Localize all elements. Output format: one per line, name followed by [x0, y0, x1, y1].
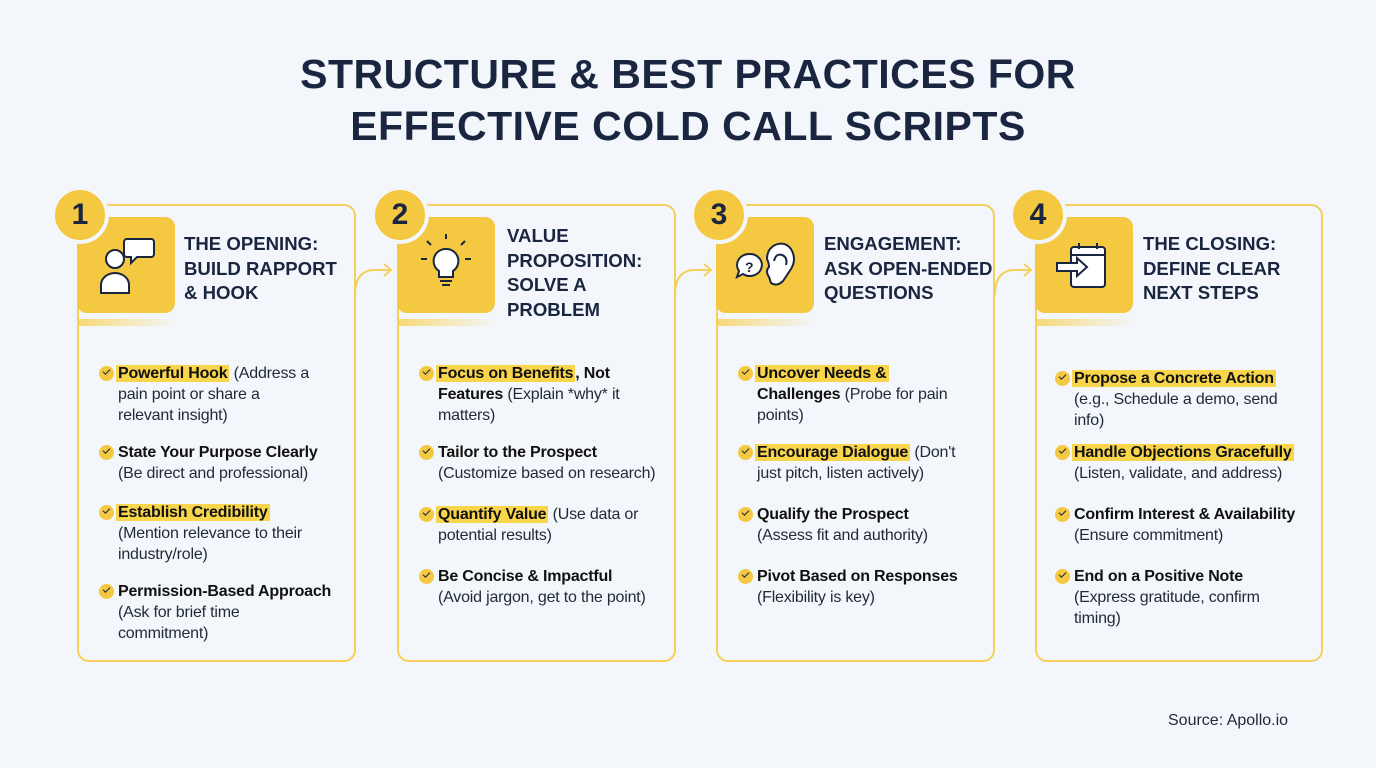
items [99, 365, 310, 424]
panel: engagement: (Flexibility is key) [757, 589, 875, 606]
items: (e.g., Schedule a demo, send [1074, 391, 1277, 408]
items: Propose a Concrete Action [1074, 370, 1274, 387]
panel: closing: End on a Positive Note [1074, 568, 1243, 585]
items: matters) [438, 407, 495, 424]
icon: person speech [77, 217, 175, 313]
title: STRUCTURE & BEST PRACTICES FOR [300, 51, 1076, 97]
panel: value proposition: potential results) [438, 527, 552, 544]
items [419, 365, 620, 424]
panel: opening: State Your Purpose Clearly [118, 444, 318, 461]
panel: value proposition: Quantify Value (Use data or [438, 506, 638, 523]
panel: engagement: (Assess fit and authority) [757, 527, 928, 544]
title [300, 51, 1076, 149]
number 4 [1009, 186, 1067, 244]
heading: ENGAGEMENT: [824, 233, 961, 254]
heading: SOLVE A [507, 274, 587, 295]
items: Challenges (Probe for pain [757, 386, 947, 403]
number 2 [371, 186, 429, 244]
heading: THE CLOSING: [1143, 233, 1276, 254]
heading: THE OPENING: [184, 233, 318, 254]
heading: VALUE [507, 225, 569, 246]
heading [824, 233, 992, 303]
heading [184, 233, 337, 303]
panel: engagement: Encourage Dialogue (Don't [757, 444, 955, 461]
panel: opening: (Mention relevance to their [118, 525, 302, 542]
panel: opening: Establish Credibility [118, 504, 268, 521]
heading [1143, 233, 1280, 303]
panel: value proposition: (Customize based on research) [438, 465, 655, 482]
number 3 [690, 186, 748, 244]
arrow 3-4 [995, 263, 1032, 295]
panel: value proposition: Be Concise & Impactful [438, 568, 612, 585]
heading: QUESTIONS [824, 282, 934, 303]
panel: opening [55, 190, 356, 662]
number 1: 1 [72, 198, 88, 231]
items [1055, 370, 1277, 429]
icon: question ear [716, 217, 814, 313]
icon: calendar arrow [1035, 217, 1133, 313]
items: Focus on Benefits, Not [438, 365, 610, 382]
panel: value proposition [375, 190, 676, 662]
panel: engagement: Qualify the Prospect [757, 506, 909, 523]
panel: closing [1013, 190, 1323, 662]
panel: engagement: Pivot Based on Responses [757, 568, 958, 585]
icon: question ear: ? [745, 259, 754, 275]
panel: value proposition: (Avoid jargon, get to the point) [438, 589, 646, 606]
heading: DEFINE CLEAR [1143, 258, 1280, 278]
items [738, 365, 947, 424]
source: Source: Apollo.io [1168, 712, 1288, 729]
panel: closing: Confirm Interest & Availability [1074, 506, 1295, 523]
arrow 2-3 [676, 263, 712, 294]
items: Powerful Hook (Address a [118, 365, 309, 382]
items: Features (Explain *why* it [438, 386, 620, 403]
heading [507, 225, 642, 320]
items: Uncover Needs & [757, 365, 886, 382]
number 2: 2 [392, 198, 408, 231]
panel: closing: Handle Objections Gracefully [1074, 444, 1292, 461]
items: points) [757, 407, 804, 424]
heading: PROPOSITION: [507, 250, 642, 270]
panel: closing: timing) [1074, 610, 1121, 627]
heading: NEXT STEPS [1143, 282, 1259, 303]
panel: engagement [694, 190, 995, 662]
panel: opening: commitment) [118, 625, 208, 642]
panel: opening: industry/role) [118, 546, 208, 563]
panel: opening: Permission-Based Approach [118, 583, 331, 600]
panel: opening: (Ask for brief time [118, 604, 240, 621]
panel: closing: (Ensure commitment) [1074, 527, 1223, 544]
items: pain point or share a [118, 386, 260, 403]
number 3: 3 [711, 198, 727, 231]
heading: & HOOK [184, 282, 258, 303]
panel: opening: (Be direct and professional) [118, 465, 308, 482]
icon: lightbulb [397, 217, 495, 313]
items: info) [1074, 412, 1104, 429]
items: relevant insight) [118, 407, 228, 424]
number 1 [51, 186, 109, 244]
title: EFFECTIVE COLD CALL SCRIPTS [350, 103, 1026, 149]
heading: PROBLEM [507, 298, 600, 320]
panel: closing: (Express gratitude, confirm [1074, 589, 1260, 606]
number 4: 4 [1030, 198, 1046, 231]
panel: engagement: just pitch, listen actively) [757, 465, 924, 482]
panel: value proposition: Tailor to the Prospect [438, 444, 597, 461]
heading: ASK OPEN-ENDED [824, 258, 992, 278]
arrow 1-2 [356, 263, 392, 294]
heading: BUILD RAPPORT [184, 258, 337, 278]
panel: closing: (Listen, validate, and address) [1074, 465, 1282, 482]
